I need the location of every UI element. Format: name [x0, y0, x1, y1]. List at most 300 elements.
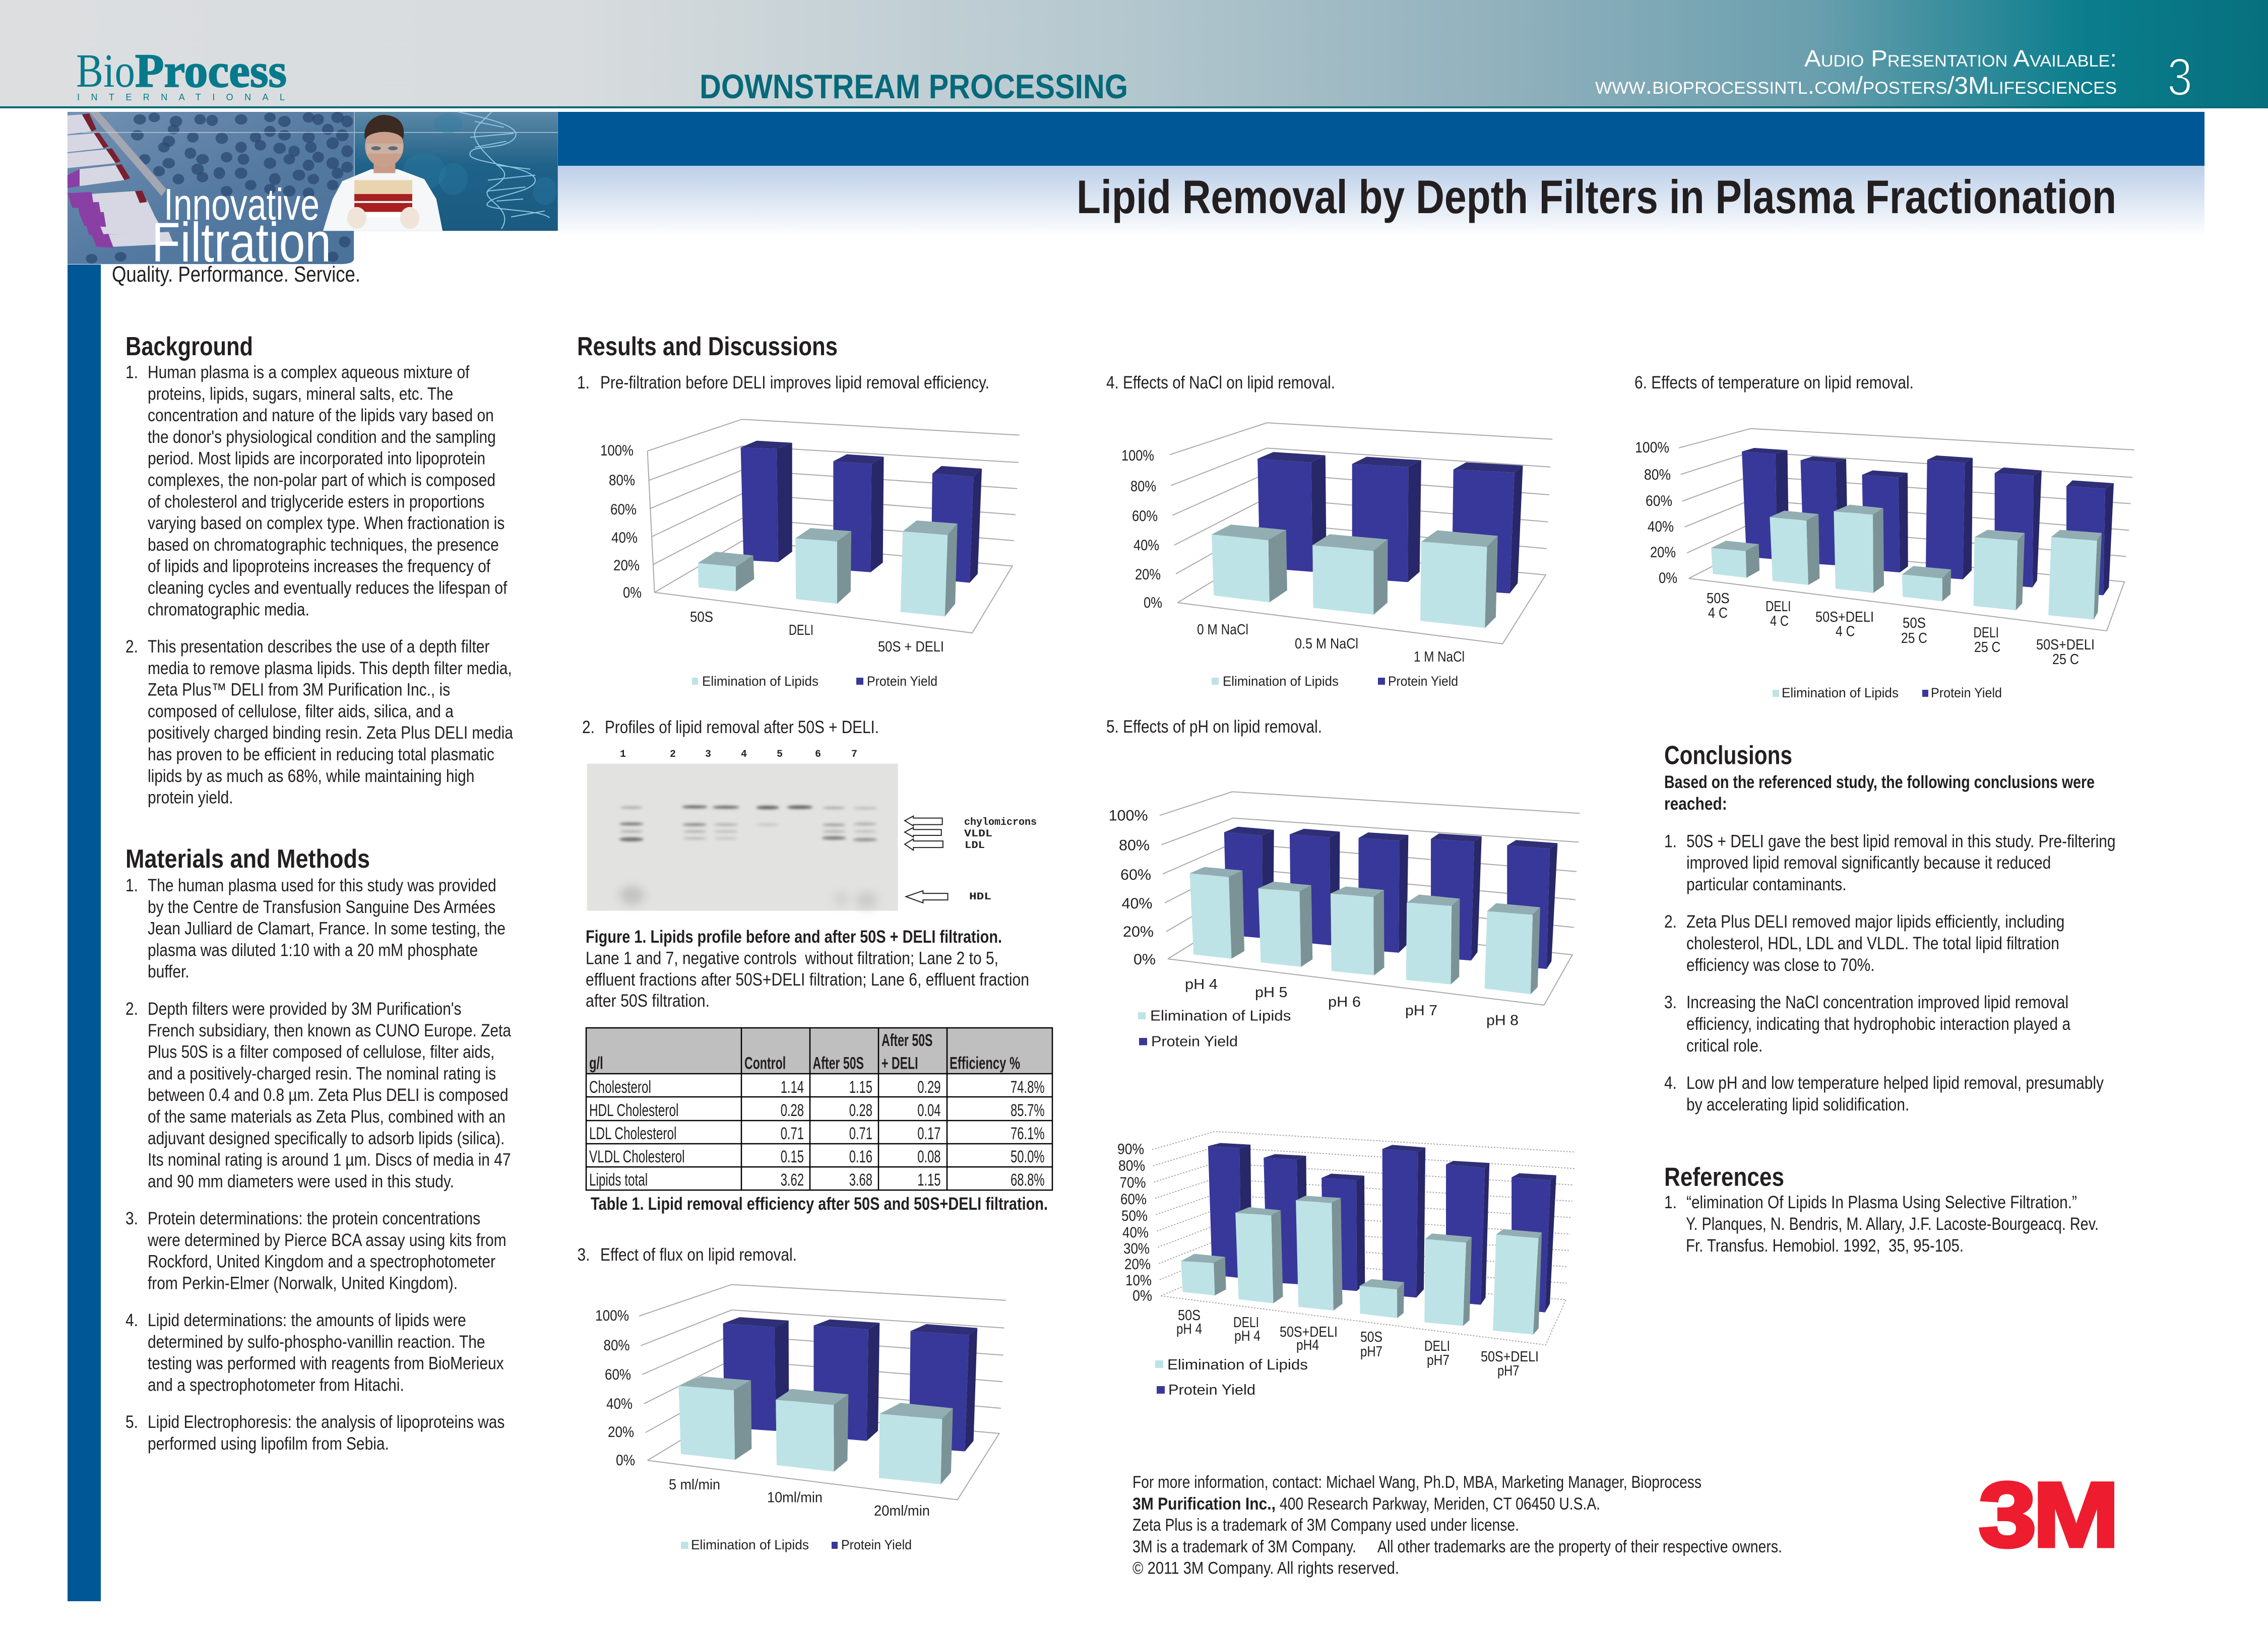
methods item 5: performed using lipofilm from Sebia.	[148, 1434, 389, 1453]
chart 7 axis labels: 40%	[1122, 1224, 1149, 1241]
chart 3 plot	[639, 1284, 1006, 1500]
electrophoresis gel image	[587, 749, 1037, 911]
table rows: 0.17	[917, 1124, 940, 1143]
chart 3 legend: Protein Yield	[841, 1537, 912, 1552]
gel lane numbers	[620, 749, 857, 760]
chart 5 axis labels: pH 4	[1185, 976, 1218, 993]
chart 1 axis labels: 60%	[610, 501, 637, 518]
chart 1 axis labels: 0%	[623, 584, 642, 601]
series: protein yield	[1208, 1143, 1556, 1313]
table 1: lipid removal efficiency	[586, 1028, 1052, 1190]
conclusion 3: 3.	[1664, 993, 1677, 1012]
chart 3 axis labels: 20%	[608, 1424, 634, 1441]
chart 7 axis labels: 10%	[1125, 1272, 1152, 1289]
gel lane numbers: 6	[815, 749, 821, 760]
methods item 2: between 0.4 and 0.8 µm. Zeta Plus DELI is composed	[148, 1085, 509, 1105]
reference 1	[1664, 1193, 2099, 1256]
chart 1 axis labels: DELI	[789, 622, 813, 638]
chart 4 axis labels: 80%	[1130, 478, 1156, 495]
series: protein yield	[1257, 452, 1523, 594]
figure 1 caption: effluent fractions after 50S+DELI filtration; Lane 6, effluent fraction	[586, 970, 1029, 990]
chart 7 axis labels: DELI	[1424, 1338, 1450, 1354]
conclusion 2: cholesterol, HDL, LDL and VLDL. The total lipid filtration	[1686, 934, 2059, 953]
background item 1: of cholesterol and triglyceride esters in proportions	[148, 492, 484, 511]
chart 5 axis labels: 100%	[1109, 807, 1148, 824]
chart 7 legend: Protein Yield	[1168, 1382, 1255, 1398]
logo: BioProcess International: Process	[135, 45, 287, 97]
table rows: 3.62	[781, 1170, 804, 1190]
chart 5 plot	[1160, 792, 1580, 1005]
methods item 2: French subsidiary, then known as CUNO Europe. Zeta	[148, 1021, 512, 1040]
banner photo: Innovative Filtration	[68, 112, 558, 274]
chart 7 axis labels: 60%	[1120, 1191, 1147, 1208]
methods item 2: 2.	[125, 999, 138, 1019]
methods item 3: were determined by Pierce BCA assay using kits from	[147, 1230, 507, 1250]
methods item 4: testing was performed with reagents from BioMerieux	[148, 1353, 504, 1373]
chart 4 axis labels: 0%	[1144, 595, 1162, 611]
chart 6 axis labels: 100%	[1635, 439, 1669, 456]
methods item 2	[125, 999, 512, 1191]
gel band labels: LDL	[965, 840, 985, 852]
heading: background: Background	[125, 332, 253, 361]
chart 7 axis labels: 50%	[1121, 1208, 1148, 1224]
methods item 3: from Perkin-Elmer (Norwalk, United Kingdom).	[148, 1273, 458, 1293]
table rows: 1.14	[781, 1078, 804, 1097]
chart 7 axis labels: 50S	[1360, 1329, 1382, 1345]
methods item 4: 4.	[125, 1311, 138, 1330]
gel lane numbers: 4	[741, 749, 747, 760]
conclusions intro	[1664, 772, 2095, 814]
title band	[558, 112, 2204, 237]
chart 7 axis labels: pH4	[1296, 1337, 1319, 1353]
heading: conclusions: Conclusions	[1664, 741, 1792, 770]
methods item 2: of the same materials as Zeta Plus, combined with an	[148, 1107, 506, 1127]
chart 7 axis labels: pH 4	[1234, 1328, 1261, 1344]
chart 3 axis labels: 80%	[604, 1337, 630, 1354]
methods item 2: and 90 mm diameters were used in this study.	[148, 1171, 454, 1191]
table rows: 0.28	[849, 1101, 872, 1120]
chart 4 axis labels: 1 M NaCl	[1414, 649, 1465, 665]
conclusion 2	[1664, 912, 2064, 975]
background item 2: lipids by as much as 68%, while maintaining high	[148, 766, 474, 786]
table rows: 1.15	[849, 1078, 872, 1097]
chart 3 axis labels: 60%	[605, 1366, 631, 1383]
table 1 caption: Table 1. Lipid removal efficiency after 50S and 50S+DELI filtration.	[591, 1194, 1048, 1214]
chart 4 axis labels: 100%	[1121, 447, 1154, 464]
background item 1: varying based on complex type. When fractionation is	[148, 513, 505, 533]
series: protein yield	[741, 441, 982, 583]
conclusion 3: critical role.	[1686, 1036, 1762, 1056]
background item 1: concentration and nature of the lipids vary based on	[148, 406, 494, 425]
chart 3 axis labels: 20ml/min	[874, 1503, 930, 1519]
heading: materials and methods: Materials and Methods	[125, 844, 370, 874]
chart 7 axis labels: pH7	[1360, 1344, 1382, 1360]
methods item 4: Lipid determinations: the amounts of lipids were	[148, 1311, 466, 1330]
figure heading 4: 4. Effects of NaCl on lipid removal.	[1106, 373, 1335, 392]
background item 2: positively charged binding resin. Zeta Plus DELI media	[148, 723, 514, 743]
table header: After 50S	[812, 1054, 864, 1073]
methods item 5	[125, 1412, 505, 1453]
chart 4 axis labels: 40%	[1133, 537, 1159, 554]
methods item 3	[125, 1209, 507, 1293]
methods item 1: by the Centre de Transfusion Sanguine Des Armées	[148, 897, 495, 917]
chart 3 axis labels: 0%	[616, 1452, 635, 1469]
chart 5 axis labels: pH 6	[1328, 994, 1361, 1010]
figure heading 3: Effect of flux on lipid removal.	[600, 1245, 797, 1265]
background item 2: media to remove plasma lipids. This depth filter media,	[148, 659, 512, 678]
series: protein yield	[1742, 448, 2114, 596]
chart 3 legend: Elimination of Lipids	[691, 1537, 809, 1552]
figure 1 caption: Lane 1 and 7, negative controls without filtration; Lane 2 to 5,	[586, 948, 998, 968]
heading: references: References	[1664, 1163, 1784, 1192]
conclusions intro: Based on the referenced study, the following conclusions were	[1664, 772, 2095, 792]
conclusion 1: 50S + DELI gave the best lipid removal in this study. Pre-filtering	[1686, 831, 2116, 851]
chart 4 axis labels: 0 M NaCl	[1197, 622, 1248, 638]
background item 2: has proven to be efficient in reducing total plasmatic	[148, 745, 494, 764]
table rows: 0.71	[781, 1124, 804, 1143]
footer contact text: © 2011 3M Company. All rights reserved.	[1132, 1559, 1399, 1578]
chart 6 axis labels: 25 C	[1901, 630, 1927, 646]
table rows	[589, 1078, 1044, 1190]
chart 4 legend: Protein Yield	[1388, 674, 1458, 689]
chart 5 axis labels: pH 5	[1255, 985, 1287, 1001]
footer contact text: 3M is a trademark of 3M Company.	[1132, 1537, 1356, 1556]
audio presentation notice	[1595, 45, 2117, 99]
chart 6 axis labels: 50S	[1903, 615, 1926, 631]
chart 7 axis labels: pH7	[1497, 1363, 1519, 1379]
table rows: 0.08	[917, 1147, 940, 1166]
chart 7 legend: Elimination of Lipids	[1167, 1357, 1308, 1373]
panel: background	[125, 332, 514, 807]
chart 1 axis labels: 50S	[690, 609, 713, 625]
poster number: 3	[2167, 48, 2192, 107]
chart 4 legend: Elimination of Lipids	[1223, 674, 1339, 689]
background item 1: 1.	[125, 362, 138, 382]
conclusion 1: improved lipid removal significantly because it reduced	[1686, 853, 2051, 873]
conclusion 4: 4.	[1664, 1073, 1677, 1093]
chart 5 axis labels: 80%	[1119, 837, 1150, 854]
table rows: 68.8%	[1011, 1170, 1044, 1190]
tagline: Quality. Performance. Service.	[112, 262, 360, 287]
background item 1: cleaning cycles and eventually reduces the lifespan of	[148, 578, 508, 598]
chart 7 plot	[1152, 1132, 1576, 1345]
reference 1: Fr. Transfus. Hemobiol. 1992, 35, 95-105.	[1686, 1236, 1964, 1256]
conclusion 1: 1.	[1664, 831, 1677, 851]
chart 6 axis labels: 50S	[1707, 591, 1730, 607]
methods item 2: Depth filters were provided by 3M Purification's	[148, 999, 461, 1019]
chart 3 axis labels: 100%	[595, 1307, 629, 1324]
audio presentation notice: Audio Presentation Available:	[1804, 45, 2117, 72]
chart 4: NaCl 3D bars	[1121, 423, 1552, 689]
chart 6 legend: Protein Yield	[1931, 685, 2002, 700]
chart 1: pre-filtration 3D bars	[600, 419, 1020, 689]
conclusion 1: particular contaminants.	[1686, 875, 1847, 894]
chart 5 legend: Elimination of Lipids	[1150, 1008, 1291, 1024]
footer contact text: Zeta Plus is a trademark of 3M Company used under license.	[1132, 1516, 1519, 1535]
footer contact text: 400 Research Parkway, Meriden, CT 06450 U.S.A.	[1280, 1494, 1600, 1514]
logo: BioProcess International	[76, 45, 287, 102]
chart 7 axis labels: 50S+DELI	[1481, 1349, 1539, 1365]
footer contact text: All other trademarks are the property of their respective owners.	[1377, 1537, 1782, 1556]
background item 1: chromatographic media.	[148, 600, 309, 619]
table header: g/l	[589, 1054, 603, 1073]
chart 5 legend: Protein Yield	[1151, 1034, 1238, 1050]
table rows: 50.0%	[1011, 1147, 1044, 1166]
chart 3: flux 3D bars	[595, 1284, 1006, 1552]
chart 7 axis labels: 20%	[1124, 1256, 1151, 1273]
chart 7 axis labels	[1117, 1141, 1539, 1379]
methods item 4: determined by sulfo-phospho-vanillin reaction. The	[148, 1332, 485, 1351]
figure heading 2: 2.	[582, 717, 595, 737]
chart 6 axis labels: 4 C	[1836, 624, 1855, 640]
chart 3 axis labels: 10ml/min	[767, 1490, 823, 1506]
chart 3 axis labels: 40%	[606, 1396, 633, 1412]
background item 1: the donor's physiological condition and the sampling	[148, 427, 496, 446]
banner photo: Innovative Filtration: Filtration	[152, 212, 331, 274]
figure heading 6: 6. Effects of temperature on lipid removal.	[1634, 373, 1914, 392]
methods item 1: plasma was diluted 1:10 with a 20 mM phosphate	[148, 940, 478, 960]
chart 6 legend	[1773, 685, 2002, 700]
gel lane numbers: 3	[705, 749, 711, 760]
chart 4 axis labels: 20%	[1135, 566, 1161, 583]
table rows: 76.1%	[1011, 1124, 1044, 1143]
methods item 3: Protein determinations: the protein concentrations	[148, 1209, 480, 1228]
chart 4 axis labels: 0.5 M NaCl	[1295, 636, 1358, 652]
background item 1: based on chromatographic techniques, the presence	[148, 535, 499, 554]
chart 5 axis labels: pH 7	[1405, 1003, 1437, 1019]
chart 1 axis labels: 40%	[611, 530, 638, 546]
background item 1: period. Most lipids are incorporated into lipoprotein	[148, 449, 485, 468]
table rows: 0.15	[781, 1147, 804, 1166]
table header: + DELI	[881, 1054, 918, 1073]
chart 1 legend: Protein Yield	[867, 674, 937, 689]
series: elimination of lipids	[1212, 525, 1498, 628]
chart 5 axis labels: 0%	[1133, 951, 1156, 968]
gel lane numbers: 2	[670, 749, 676, 760]
chart 6 axis labels: 25 C	[2052, 651, 2079, 668]
chart 4 axis labels	[1121, 447, 1465, 665]
table rows: LDL Cholesterol	[589, 1124, 676, 1143]
gel lane numbers: 5	[777, 749, 783, 760]
chart 6 axis labels: 50S+DELI	[2036, 637, 2095, 653]
chart 5: pH 3D bars	[1109, 792, 1580, 1050]
background item 2: composed of cellulose, filter aids, silica, and a	[148, 701, 454, 721]
chart 5 axis labels: pH 8	[1486, 1013, 1519, 1029]
conclusion 2: 2.	[1664, 912, 1677, 932]
section label: Downstream Processing: DOWNSTREAM PROCESSING	[700, 68, 1128, 106]
table rows: 0.71	[849, 1124, 872, 1143]
panel: materials and methods	[125, 844, 512, 1453]
chart 6: temperature 3D bars	[1635, 429, 2134, 700]
chart 6 axis labels: 4 C	[1708, 605, 1728, 621]
chart 7 axis labels: pH7	[1427, 1352, 1450, 1368]
background item 2: protein yield.	[148, 788, 233, 807]
reference 1: Y. Planques, N. Bendris, M. Allary, J.F. Lacoste-Bourgeacq. Rev.	[1686, 1214, 2099, 1234]
chart 1 axis labels: 20%	[613, 557, 640, 574]
table rows: 0.04	[917, 1101, 940, 1120]
table header: After 50S	[881, 1031, 932, 1050]
series: protein yield	[723, 1317, 977, 1452]
methods item 2: adjuvant designed specifically to adsorb lipids (silica).	[148, 1129, 505, 1148]
chart 7 legend	[1155, 1357, 1308, 1398]
conclusion 3: efficiency, indicating that hydrophobic interaction played a	[1686, 1014, 2071, 1034]
heading: results and discussions: Results and Discussions	[577, 332, 838, 361]
figure heading 5: 5. Effects of pH on lipid removal.	[1106, 717, 1322, 737]
chart 6 axis labels: 60%	[1646, 493, 1672, 509]
methods item 1: 1.	[125, 876, 138, 895]
chart 7 axis labels: 70%	[1120, 1174, 1146, 1191]
figure 1 caption: Figure 1. Lipids profile before and after 50S + DELI filtration.	[586, 927, 1002, 947]
chart 6 axis labels: 80%	[1644, 467, 1671, 483]
panel: conclusions	[1664, 741, 2116, 1115]
audio presentation notice: www.bioprocessintl.com/posters/3Mlifesciences	[1595, 73, 2117, 99]
background item 1: proteins, lipids, sugars, mineral salts, etc. The	[148, 384, 453, 404]
gel band labels: VLDL	[964, 828, 992, 840]
table rows: 3.68	[849, 1170, 872, 1190]
table rows: 0.28	[781, 1101, 804, 1120]
chart 6 axis labels: 0%	[1659, 570, 1677, 586]
banner photo: Innovative Filtration: Innovative	[164, 179, 320, 229]
methods item 2: Its nominal rating is around 1 µm. Discs of media in 47	[148, 1150, 511, 1169]
chart 6 axis labels: 25 C	[1974, 639, 2001, 656]
background item 1: complexes, the non-polar part of which is composed	[148, 470, 495, 490]
background item 1: Human plasma is a complex aqueous mixture of	[148, 362, 470, 382]
gel lane numbers: 7	[851, 749, 857, 760]
methods item 1: Jean Julliard de Clamart, France. In some testing, the	[148, 919, 506, 938]
chart 1 plot	[648, 419, 1020, 633]
conclusion 4	[1664, 1073, 2104, 1115]
chart 7 axis labels: 50S	[1178, 1307, 1201, 1324]
series: elimination of lipids	[1711, 505, 2102, 620]
chart 1 axis labels	[600, 442, 944, 655]
methods item 1	[125, 876, 506, 981]
chart 6 axis labels: DELI	[1766, 599, 1791, 615]
figure heading 2: Profiles of lipid removal after 50S + DELI.	[605, 717, 879, 737]
methods item 5: 5.	[125, 1412, 138, 1432]
background item 1: of lipids and lipoproteins increases the frequency of	[148, 557, 491, 576]
header gradient band	[0, 0, 2268, 108]
background item 2	[125, 637, 514, 807]
chart 6 axis labels: 50S+DELI	[1815, 609, 1874, 625]
table rows: 85.7%	[1011, 1101, 1044, 1120]
series: protein yield	[1224, 827, 1557, 969]
chart 5 axis labels: 20%	[1123, 924, 1154, 940]
gel arrows	[905, 816, 948, 903]
chart 4 axis labels: 60%	[1132, 508, 1158, 525]
methods item 2: Plus 50S is a filter composed of cellulose, filter aids,	[148, 1042, 494, 1062]
conclusion 2: efficiency was close to 70%.	[1686, 955, 1875, 975]
figure heading 1: Pre-filtration before DELI improves lipid removal efficiency.	[600, 373, 989, 392]
reference 1: 1.	[1664, 1193, 1677, 1212]
chart 4 legend	[1212, 674, 1458, 689]
chart 5 axis labels: 40%	[1122, 895, 1152, 912]
chart 5 axis labels	[1109, 807, 1519, 1029]
gel band labels: HDL	[969, 891, 991, 903]
gel lane numbers: 1	[620, 749, 626, 760]
conclusion 4: Low pH and low temperature helped lipid removal, presumably	[1686, 1073, 2104, 1093]
chart 7 axis labels: DELI	[1233, 1315, 1259, 1331]
chart 7 axis labels: 50S+DELI	[1280, 1324, 1338, 1340]
methods item 1: buffer.	[148, 962, 190, 981]
chart 7: pH and filter combination 3D bars	[1117, 1132, 1576, 1398]
footer contact text	[1132, 1473, 1782, 1578]
methods item 3: 3.	[125, 1209, 138, 1228]
conclusions intro: reached:	[1664, 794, 1727, 814]
table rows: Lipids total	[589, 1170, 648, 1190]
background item 1	[125, 362, 508, 619]
chart 7 axis labels: 80%	[1118, 1158, 1145, 1174]
chart 6 plot	[1679, 429, 2134, 631]
background item 2: 2.	[125, 637, 138, 657]
table rows: 1.15	[917, 1170, 940, 1190]
panel: references	[1664, 1163, 2099, 1256]
chart 3 axis labels: 5 ml/min	[669, 1477, 720, 1493]
chart 6 axis labels	[1635, 439, 2095, 668]
figure 1 caption: after 50S filtration.	[586, 991, 710, 1011]
chart 1 legend: Elimination of Lipids	[702, 674, 818, 689]
conclusion 1	[1664, 831, 2116, 894]
table header: Control	[744, 1054, 786, 1073]
chart 7 axis labels: 30%	[1123, 1240, 1150, 1257]
chart 3 axis labels	[595, 1307, 930, 1519]
series: elimination of lipids	[678, 1377, 953, 1484]
conclusion 2: Zeta Plus DELI removed major lipids efficiently, including	[1686, 912, 2064, 932]
chart 7 axis labels: 90%	[1117, 1141, 1144, 1158]
table rows: 0.16	[849, 1147, 872, 1166]
chart 6 legend: Elimination of Lipids	[1782, 685, 1899, 700]
chart 7 axis labels: pH 4	[1176, 1321, 1202, 1337]
gel band labels: chylomicrons	[964, 817, 1037, 828]
conclusion 3	[1664, 993, 2071, 1056]
background item 2: Zeta Plus™ DELI from 3M Purification Inc., is	[148, 680, 450, 699]
chart 1 axis labels: 50S + DELI	[878, 639, 944, 655]
methods item 4: and a spectrophotometer from Hitachi.	[148, 1375, 404, 1395]
methods item 3: Rockford, United Kingdom and a spectrophotometer	[148, 1252, 495, 1271]
logo: 3M: 3M	[1979, 1463, 2116, 1566]
chart 1 axis labels: 80%	[609, 472, 635, 489]
chart 6 axis labels: DELI	[1974, 625, 1999, 641]
methods item 1: The human plasma used for this study was provided	[148, 876, 496, 895]
series: elimination of lipids	[698, 520, 958, 616]
figure heading 1: 1.	[577, 373, 590, 392]
chart 7 axis labels: 0%	[1132, 1288, 1152, 1304]
table rows: 0.29	[917, 1078, 940, 1097]
chart 5 axis labels: 60%	[1120, 867, 1151, 883]
series: elimination of lipids	[1181, 1196, 1542, 1335]
chart 1 axis labels: 100%	[600, 442, 634, 459]
reference 1: “elimination Of Lipids In Plasma Using Selective Filtration.”	[1686, 1193, 2077, 1212]
series: elimination of lipids	[1190, 867, 1540, 994]
logo: BioProcess International: Bio	[76, 45, 135, 97]
methods item 5: Lipid Electrophoresis: the analysis of lipoproteins was	[148, 1412, 505, 1432]
background item 2: This presentation describes the use of a depth filter	[148, 637, 490, 657]
conclusion 3: Increasing the NaCl concentration improved lipid removal	[1686, 993, 2068, 1012]
chart 4 plot	[1170, 423, 1552, 644]
chart 6 axis labels: 20%	[1650, 544, 1676, 561]
table header: Efficiency %	[950, 1054, 1020, 1073]
table rows: 74.8%	[1011, 1078, 1044, 1097]
chart 6 axis labels: 4 C	[1770, 613, 1789, 629]
figure 1 caption	[586, 927, 1029, 1011]
methods item 4	[125, 1311, 504, 1395]
methods item 2: and a positively-charged resin. The nominal rating is	[148, 1064, 496, 1083]
table rows: Cholesterol	[589, 1078, 651, 1097]
chart 1 legend	[692, 674, 937, 689]
figure heading 3: 3.	[578, 1245, 590, 1265]
footer contact text: For more information, contact: Michael Wang, Ph.D, MBA, Marketing Manager, Bioprocess	[1132, 1473, 1702, 1492]
left blue stripe	[68, 265, 101, 1601]
table rows: VLDL Cholesterol	[589, 1147, 685, 1166]
